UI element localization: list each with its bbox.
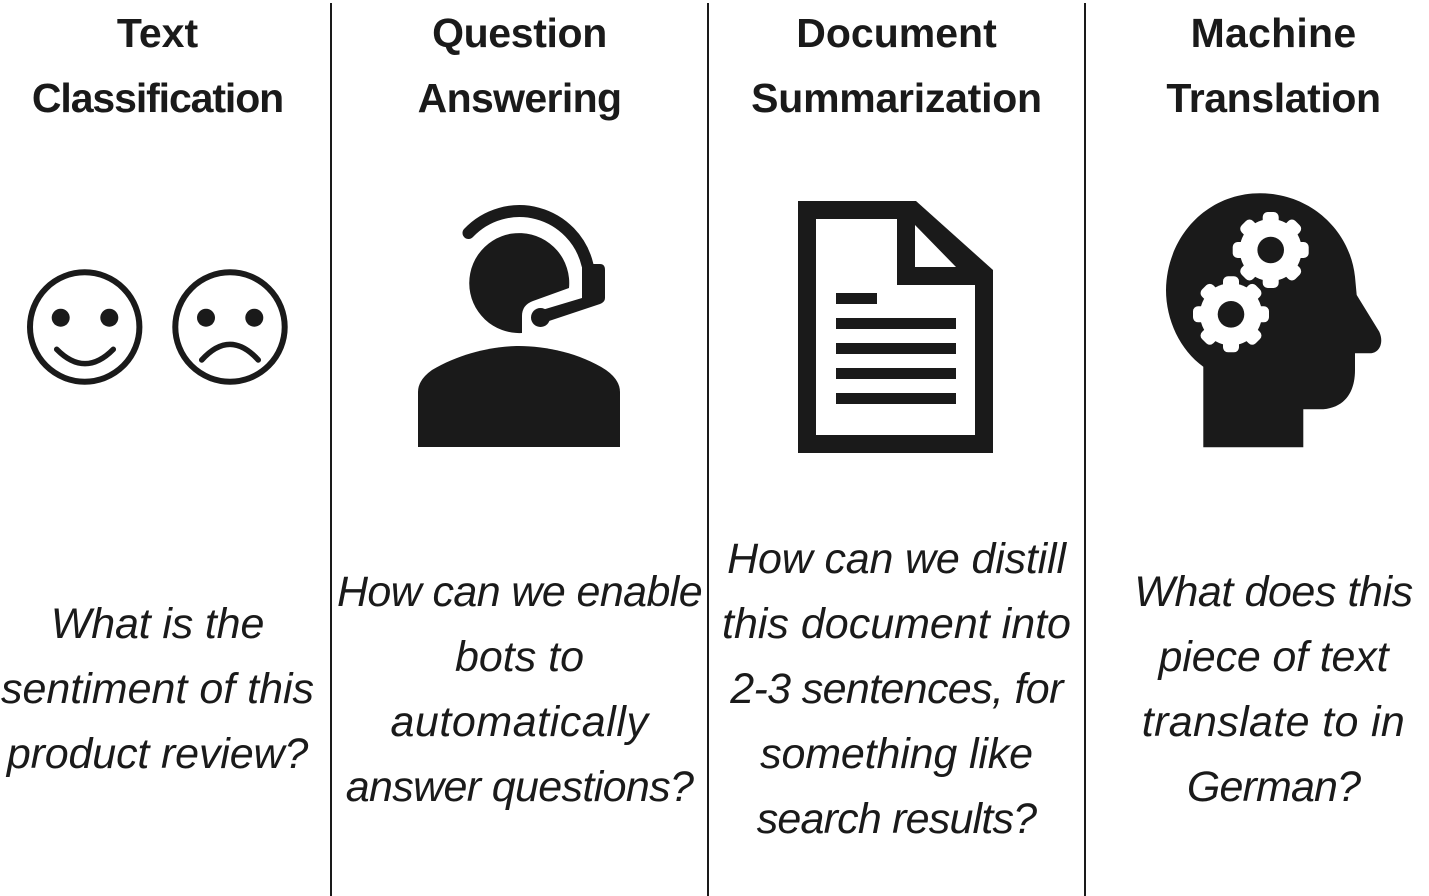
icon: head with gears [1166, 193, 1381, 447]
heading: Question Answering: Question [432, 10, 607, 56]
heading: Text Classification: Text [117, 10, 198, 56]
heading: Document Summarization: Summarization [751, 75, 1042, 121]
question: Question Answering: answer questions? [346, 763, 693, 811]
heading: Text Classification [32, 10, 283, 121]
question: Machine Translation: translate to in [1142, 698, 1405, 746]
question: Document Summarization: search results? [757, 795, 1036, 843]
question: Document Summarization: How can we distill [727, 535, 1066, 583]
icon: happy face [30, 272, 139, 382]
heading: Question Answering: Answering [418, 75, 621, 121]
heading: Machine Translation: Machine [1191, 10, 1356, 56]
heading: Document Summarization: Document [796, 10, 997, 56]
question: Question Answering: bots to [455, 633, 584, 681]
icon: document [798, 201, 993, 453]
heading: Machine Translation [1166, 10, 1381, 121]
question: Document Summarization: something like [760, 730, 1033, 778]
question: Question Answering: automatically [390, 698, 649, 746]
question: Document Summarization: this document into [722, 600, 1071, 648]
question: Machine Translation: piece of text [1159, 633, 1388, 681]
heading: Machine Translation: Translation [1166, 75, 1381, 121]
icon: support agent with headset [418, 211, 620, 447]
question: Document Summarization: 2-3 sentences, for [730, 665, 1063, 713]
question: Machine Translation: What does this [1134, 568, 1413, 616]
question: Text Classification: sentiment of this [1, 665, 314, 713]
question: Text Classification: product review? [7, 730, 308, 778]
question: Machine Translation: German? [1187, 763, 1360, 811]
icon: sad face [175, 272, 285, 382]
question: Machine Translation [1134, 568, 1413, 811]
question: Text Classification: What is the [51, 600, 264, 648]
question: Question Answering [337, 568, 702, 811]
question: Question Answering: How can we enable [337, 568, 702, 616]
question: Text Classification [1, 600, 314, 778]
question: Document Summarization [722, 535, 1071, 843]
heading: Question Answering [418, 10, 621, 121]
heading: Text Classification: Classification [32, 75, 283, 121]
heading: Document Summarization [751, 10, 1042, 121]
